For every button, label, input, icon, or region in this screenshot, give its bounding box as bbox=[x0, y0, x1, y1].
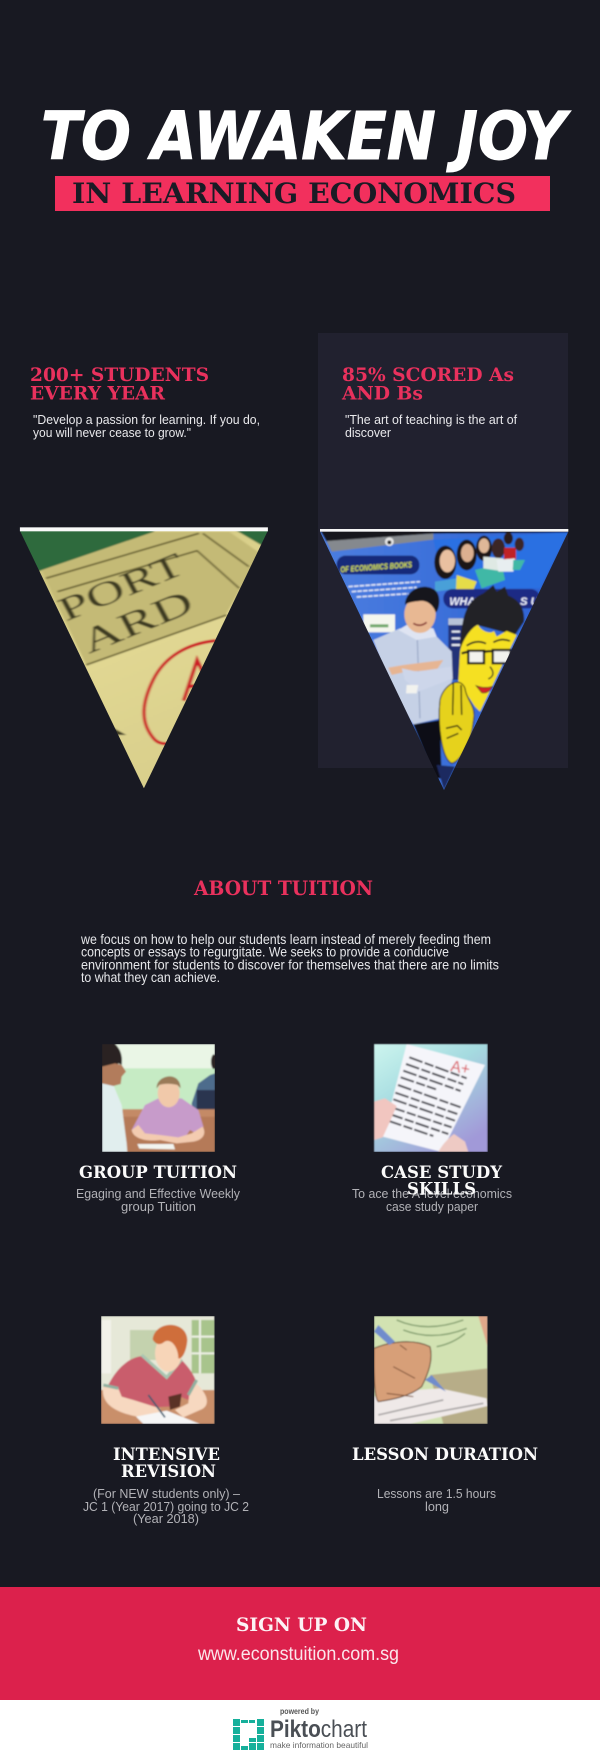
heading and text: group tuition: group Tuition bbox=[121, 1199, 196, 1214]
stat: 85% scored: discover bbox=[345, 425, 392, 440]
icon: logo squares bbox=[233, 1719, 264, 1750]
stat: 85% scored: 85% SCORED As bbox=[342, 364, 514, 386]
stat: 85% scored: "The art of teaching is the art of bbox=[345, 412, 517, 427]
heading and text: intensive revision: (Year 2018) bbox=[133, 1511, 199, 1526]
panel: sign up banner: SIGN UP ON bbox=[236, 1614, 367, 1636]
photo: tutor and cartoon triangle: WHAT bbox=[449, 596, 482, 608]
panel: sign up banner: www.econstuition.com.sg bbox=[197, 1644, 399, 1665]
heading and text: case study skills: case study paper bbox=[386, 1199, 479, 1214]
stat: 85% scored bbox=[341, 364, 517, 440]
heading and text: intensive revision: (For NEW students only) – bbox=[93, 1486, 241, 1501]
text block: about paragraph bbox=[80, 932, 499, 985]
footer: piktochart logo: make information beautiful bbox=[270, 1740, 368, 1750]
heading and text: intensive revision: INTENSIVE bbox=[113, 1445, 220, 1465]
heading and text: lesson duration: LESSON DURATION bbox=[352, 1445, 538, 1465]
stat: 200+ students: EVERY YEAR bbox=[30, 382, 165, 404]
heading and text: group tuition bbox=[76, 1163, 240, 1214]
illustration: group tuition bbox=[102, 1044, 217, 1152]
heading and text: intensive revision: JC 1 (Year 2017) going to JC 2 bbox=[83, 1499, 249, 1514]
photo: tutor and cartoon triangle bbox=[320, 529, 570, 793]
photo: report card triangle: ARD bbox=[74, 583, 200, 662]
heading and text: lesson duration: long bbox=[425, 1499, 449, 1514]
illustration: intensive revision bbox=[101, 1316, 215, 1424]
heading and text: case study skills bbox=[352, 1163, 512, 1214]
photo: tutor and cartoon triangle: OF ECONOMICS BOOKS bbox=[340, 559, 413, 574]
text block: about paragraph: concepts or essays to regurgitate. We seeks to provide a conducive bbox=[81, 944, 449, 960]
heading and text: intensive revision bbox=[83, 1445, 249, 1526]
text block: about paragraph: environment for students to discover for themselves that there are no limits bbox=[81, 958, 499, 972]
panel: sign up banner bbox=[0, 1587, 600, 1700]
illustration: case study paper bbox=[374, 1044, 488, 1152]
stat: 200+ students: you will never cease to grow." bbox=[33, 425, 191, 440]
heading and text: lesson duration bbox=[352, 1445, 538, 1514]
stat: 200+ students bbox=[30, 364, 260, 440]
illustration: writing hand bbox=[374, 1316, 488, 1424]
text block: about paragraph: we focus on how to help our students learn instead of merely feeding them bbox=[80, 932, 491, 947]
heading and text: group tuition: GROUP TUITION bbox=[79, 1163, 237, 1183]
heading: about tuition: ABOUT TUITION bbox=[193, 877, 373, 900]
stat: 85% scored: AND Bs bbox=[341, 382, 423, 404]
photo: report card triangle bbox=[15, 527, 276, 793]
text block: about paragraph: to what they can achieve. bbox=[81, 970, 220, 985]
footer: piktochart logo bbox=[0, 1700, 600, 1760]
subtitle banner: IN LEARNING ECONOMICS bbox=[72, 177, 516, 210]
heading and text: case study skills: SKILLS bbox=[407, 1180, 476, 1200]
photo: tutor and cartoon triangle: S U bbox=[520, 596, 540, 608]
stat: 200+ students: 200+ STUDENTS bbox=[30, 364, 209, 386]
heading and text: case study skills: To ace the A-level economics bbox=[352, 1186, 512, 1201]
illustration: case study paper: A+ bbox=[449, 1058, 472, 1079]
stat: 200+ students: "Develop a passion for learning. If you do, bbox=[33, 412, 260, 427]
heading and text: intensive revision: REVISION bbox=[121, 1462, 216, 1482]
heading and text: case study skills: CASE STUDY bbox=[381, 1163, 503, 1183]
heading and text: lesson duration: Lessons are 1.5 hours bbox=[377, 1486, 496, 1501]
photo: report card triangle: PORT bbox=[51, 545, 191, 628]
panel: right column background bbox=[318, 333, 568, 768]
heading and text: group tuition: Egaging and Effective Weekly bbox=[76, 1186, 240, 1201]
footer: piktochart logo: Piktochart bbox=[270, 1716, 367, 1743]
footer: piktochart logo: powered by bbox=[280, 1707, 319, 1716]
